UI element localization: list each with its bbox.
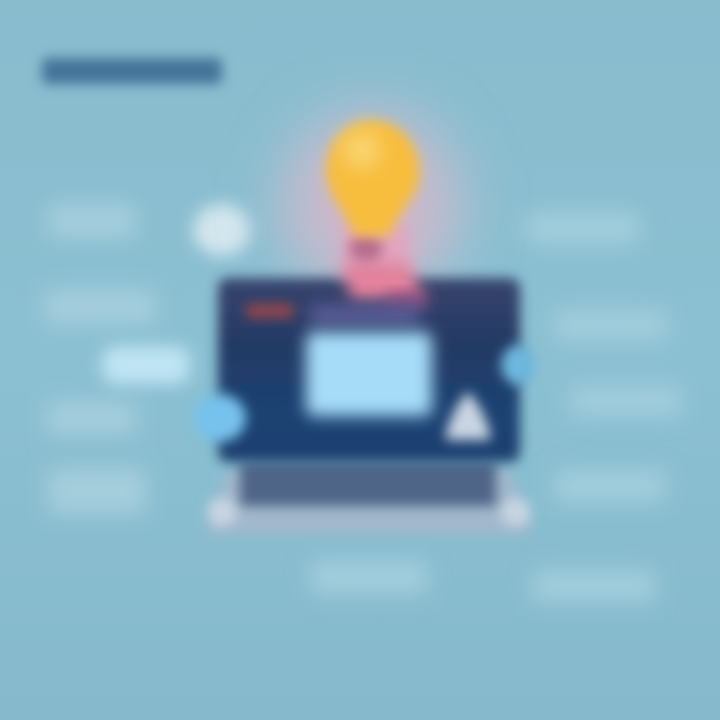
laptop keyboard	[240, 462, 496, 506]
light bulb	[326, 120, 420, 236]
bulb glow	[247, 75, 497, 335]
blue bubble right	[501, 345, 535, 385]
pink bulb base on screen	[340, 262, 425, 300]
blue bubble left	[194, 394, 246, 442]
laptop base	[206, 470, 532, 534]
magenta accent	[381, 293, 429, 307]
laptop screen	[218, 278, 520, 462]
light bubble top left	[193, 204, 251, 256]
bulb highlight	[344, 132, 380, 168]
white triangle icon	[446, 392, 490, 440]
small red mark	[246, 304, 294, 318]
title	[42, 58, 222, 84]
bottom label	[310, 560, 428, 594]
pink haze behind neck	[345, 225, 410, 270]
bulb neck	[349, 234, 383, 262]
light bubble left	[102, 346, 190, 384]
purple haze on screen	[310, 305, 420, 325]
left labels	[44, 204, 156, 514]
screen window	[306, 332, 432, 416]
right labels	[526, 212, 682, 602]
